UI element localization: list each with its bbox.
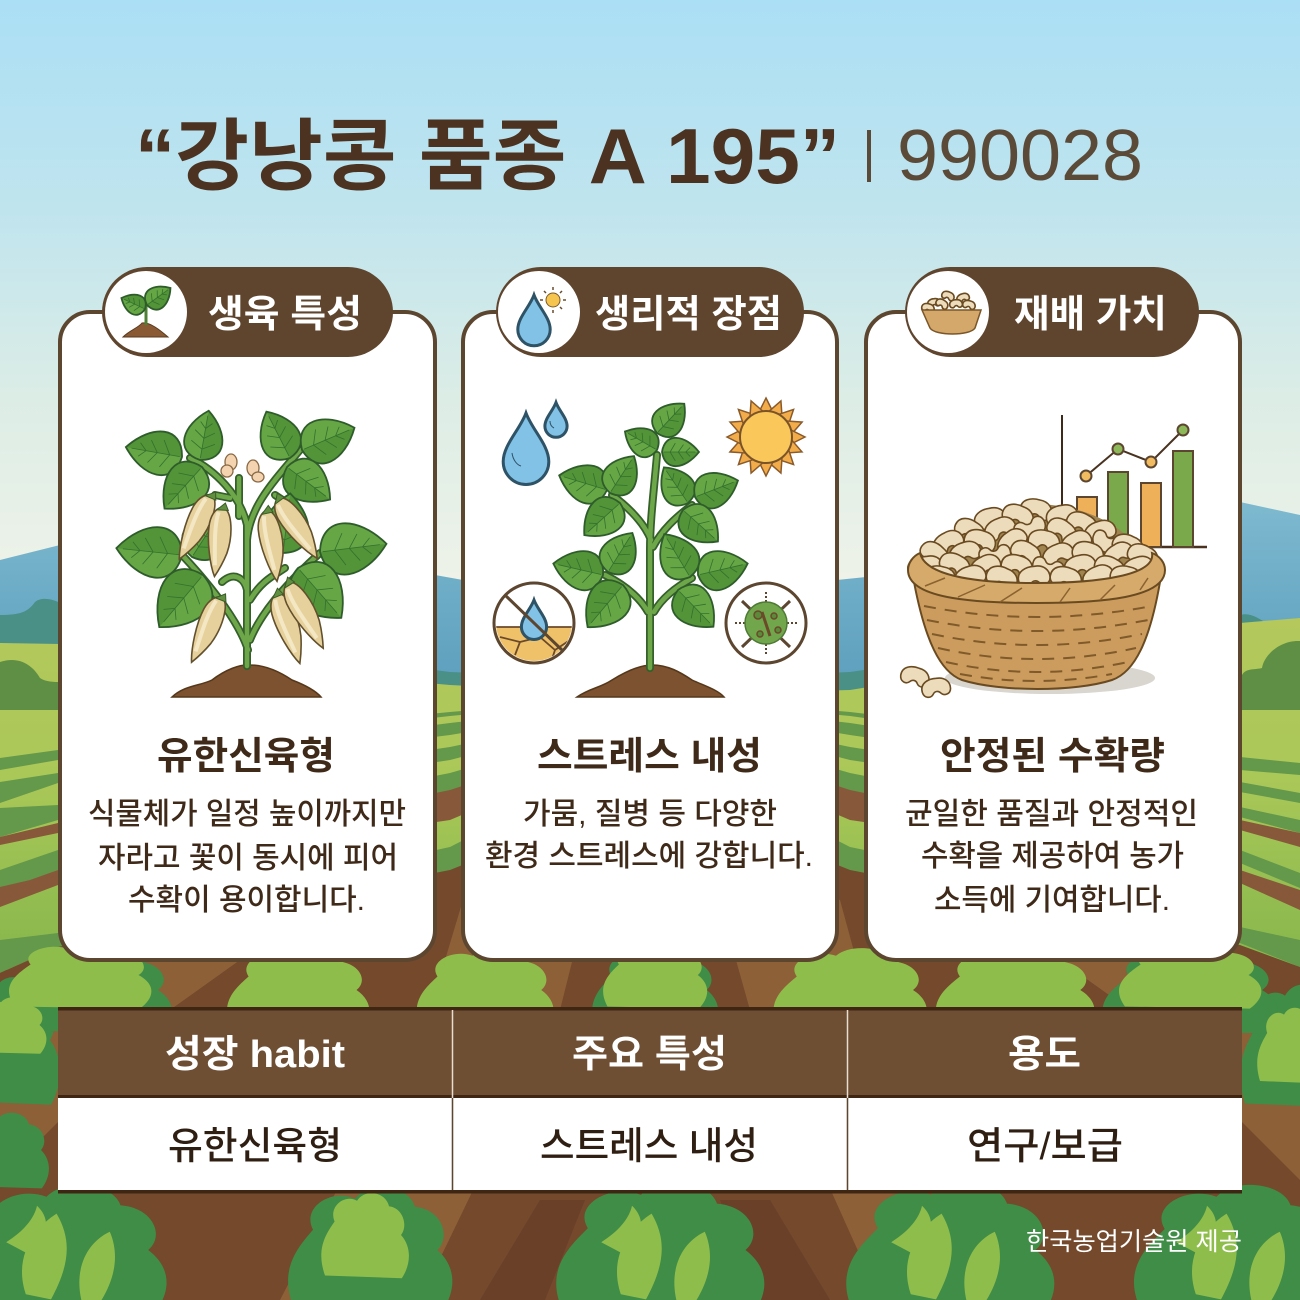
title: 990028 [897, 116, 1143, 196]
description: 환경 스트레스에 강합니다. [485, 840, 813, 873]
title: “강낭콩 품종 A 195” [135, 112, 840, 200]
subheading: 유한신육형 [157, 736, 335, 778]
subheading: 스트레스 내성 [537, 736, 762, 778]
description [88, 798, 406, 917]
table values [168, 1126, 1123, 1168]
panel: physiological advantages [463, 267, 837, 960]
illustration: basket of beans [899, 497, 1165, 698]
panel heading: 재배 가치 [1014, 294, 1167, 336]
description [485, 798, 813, 873]
icon: water drops [503, 402, 567, 484]
chart: rising yield bars and trend line [1062, 415, 1207, 547]
description: 수확을 제공하여 농가 [921, 840, 1184, 873]
table values: 유한신육형 [168, 1126, 342, 1168]
description: 자라고 꽃이 동시에 피어 [98, 842, 398, 875]
table headers: 주요 특성 [572, 1034, 727, 1076]
description [905, 798, 1198, 917]
table headers [165, 1034, 1081, 1076]
table values: 스트레스 내성 [540, 1126, 758, 1168]
icon: drop and sun [498, 271, 580, 353]
source credit: 한국농업기술원 제공 [1026, 1228, 1242, 1256]
icon: no drought [490, 583, 580, 667]
illustration: determinate bean plant [114, 403, 390, 697]
icon: sun [727, 398, 805, 476]
description: 수확이 용이합니다. [128, 884, 365, 917]
subheading: 안정된 수확량 [940, 736, 1165, 778]
panel: cultivation value [866, 267, 1240, 960]
illustration: stress tolerant plant [490, 393, 806, 697]
description: 소득에 기여합니다. [934, 884, 1170, 917]
description: 가뭄, 질병 등 다양한 [523, 798, 777, 831]
panel: growth characteristics [60, 267, 435, 960]
icon: no disease [726, 583, 806, 663]
icon: sprout [105, 271, 187, 353]
table headers: 성장 habit [165, 1034, 345, 1076]
table headers: 용도 [1008, 1034, 1081, 1076]
description: 균일한 품질과 안정적인 [905, 798, 1198, 831]
table values: 연구/보급 [967, 1126, 1123, 1168]
panel heading: 생육 특성 [208, 294, 362, 336]
icon: mini bean basket [907, 271, 989, 353]
title [135, 112, 1143, 200]
description: 식물체가 일정 높이까지만 [88, 798, 406, 831]
summary table [58, 1007, 1242, 1194]
panel heading: 생리적 장점 [595, 294, 782, 336]
